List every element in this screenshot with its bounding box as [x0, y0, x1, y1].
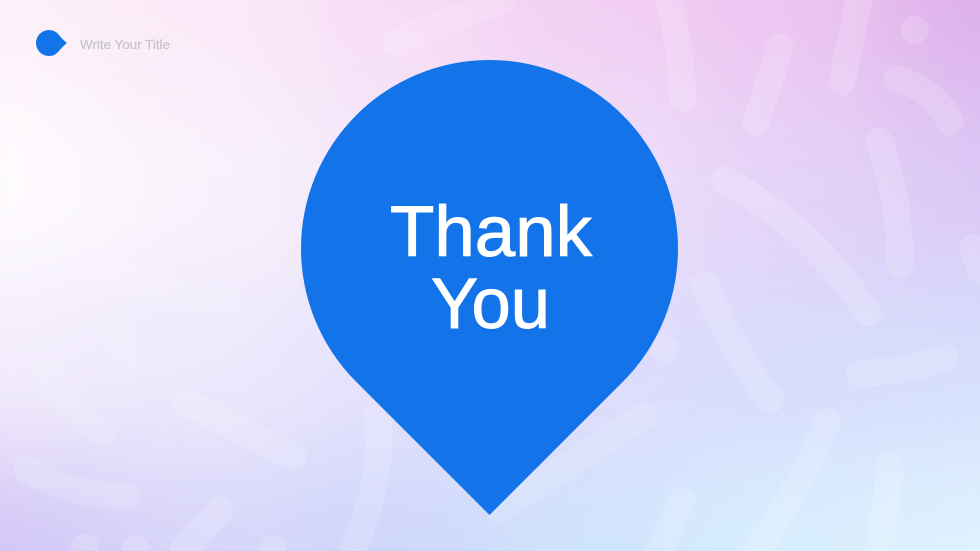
thank you heading: You [431, 265, 550, 344]
central pin shape [301, 60, 678, 515]
icon: small blue pin [36, 30, 67, 56]
thank you heading [390, 193, 592, 344]
thank you heading: Thank [390, 193, 592, 272]
header title: Write Your Title [80, 38, 170, 52]
